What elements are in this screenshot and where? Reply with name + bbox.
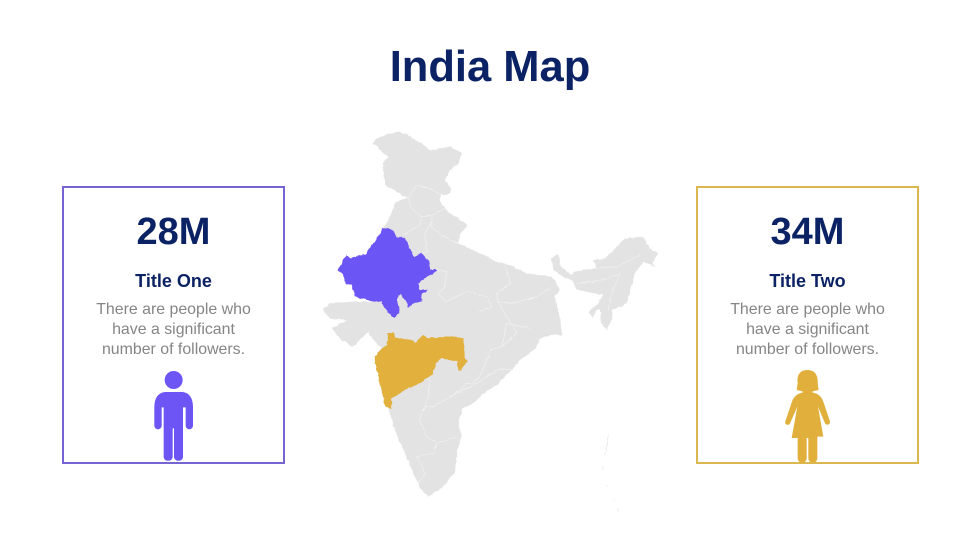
statistic: 34M — [771, 211, 844, 253]
card text: have a significant — [112, 321, 235, 338]
map: mainland India — [323, 132, 562, 497]
map: Rajasthan highlighted — [337, 228, 437, 317]
card text — [730, 300, 885, 358]
panel: right stat card — [696, 186, 919, 464]
card text: There are people who — [730, 300, 885, 318]
card heading: Title Two — [769, 271, 846, 291]
map: northeast India — [552, 237, 658, 330]
statistic: 28M — [137, 211, 210, 253]
map: Maharashtra highlighted — [374, 333, 468, 408]
card text: have a significant — [746, 321, 869, 338]
card text: There are people who — [96, 300, 251, 318]
map: state borders — [403, 185, 640, 483]
title: India Map — [390, 43, 590, 91]
card text: number of followers. — [736, 341, 879, 358]
card text — [96, 300, 251, 358]
map: Andaman and Nicobar islands — [603, 435, 619, 512]
card text: number of followers. — [102, 341, 245, 358]
panel: left stat card — [62, 186, 285, 464]
card heading: Title One — [135, 271, 212, 291]
